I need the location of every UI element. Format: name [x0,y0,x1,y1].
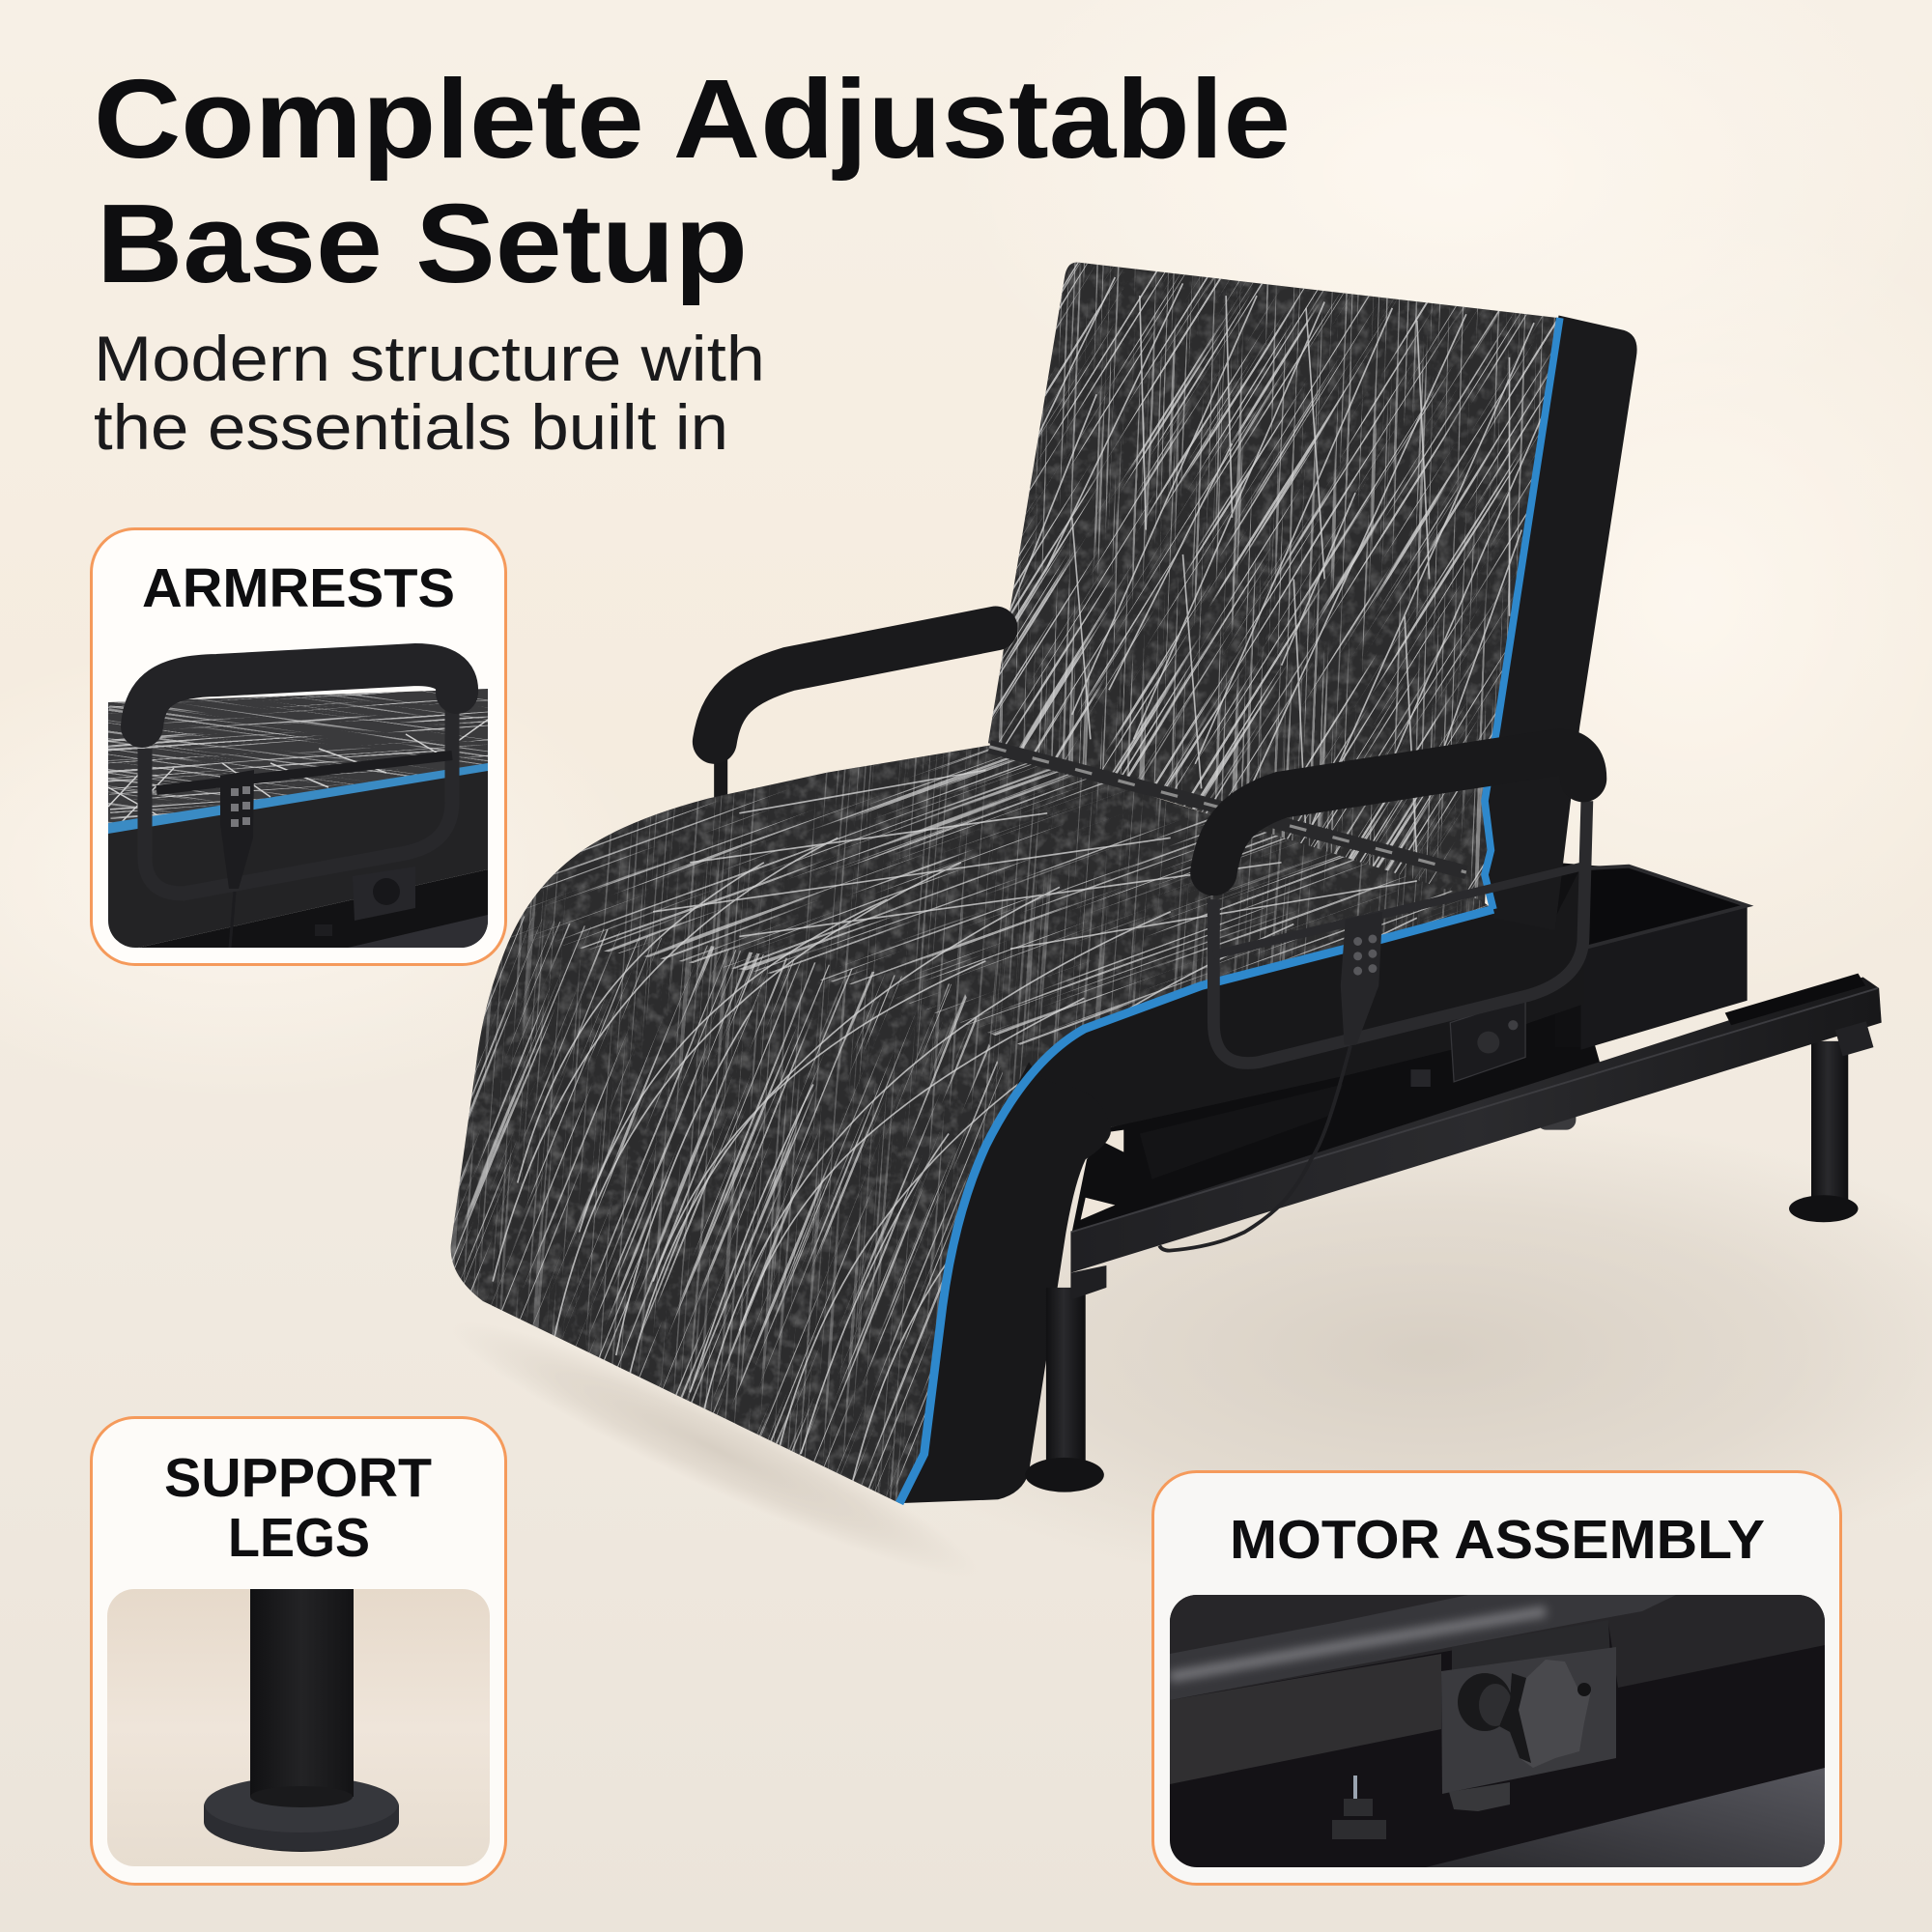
backrest fabric [988,263,1556,904]
inset photo: armrest close-up [108,643,488,948]
panel: armrests [81,526,518,964]
label: support legs [164,1447,432,1569]
panel: support legs [91,1418,506,1884]
label: armrests: ARMRESTS [142,557,455,619]
motor housing box [1555,863,1747,1050]
subtitle: the essentials built in [94,391,728,463]
subtitle: Modern structure with [94,323,765,394]
mounting bracket and knob [1410,998,1525,1087]
product: adjustable base with armrests [450,263,1882,1505]
panel: motor assembly [1153,1472,1841,1884]
near armrest tube frame [1213,801,1587,1064]
label: support legs: LEGS [228,1507,370,1569]
steel bed frame rail [1070,974,1882,1273]
near armrest pad [1213,753,1583,872]
title: Base Setup [97,181,748,306]
under-frame interior [1072,1005,1602,1233]
rear support leg [1537,1041,1858,1222]
remote cable [1159,1046,1350,1251]
inset photo: knob bracket close-up [1170,1595,1825,1867]
far armrest post [716,754,726,807]
label: motor assembly: MOTOR ASSEMBLY [1230,1509,1765,1571]
title [94,56,1291,306]
backrest side panel [1485,316,1637,930]
label: support legs: SUPPORT [164,1447,432,1509]
backrest blue piping [1485,318,1560,909]
inset photo: support leg close-up [107,1589,490,1866]
seat hinge seam [989,747,1466,872]
title: Complete Adjustable [94,56,1291,182]
far armrest pad [715,629,996,742]
seat blue piping [899,909,1493,1503]
front fold of mattress [899,1062,1111,1503]
hand remote [1341,912,1382,1045]
front support leg [1025,1265,1106,1492]
subtitle [94,323,765,463]
seat and leg cushion fabric [450,746,1489,1503]
mattress side panel [1029,863,1583,1127]
